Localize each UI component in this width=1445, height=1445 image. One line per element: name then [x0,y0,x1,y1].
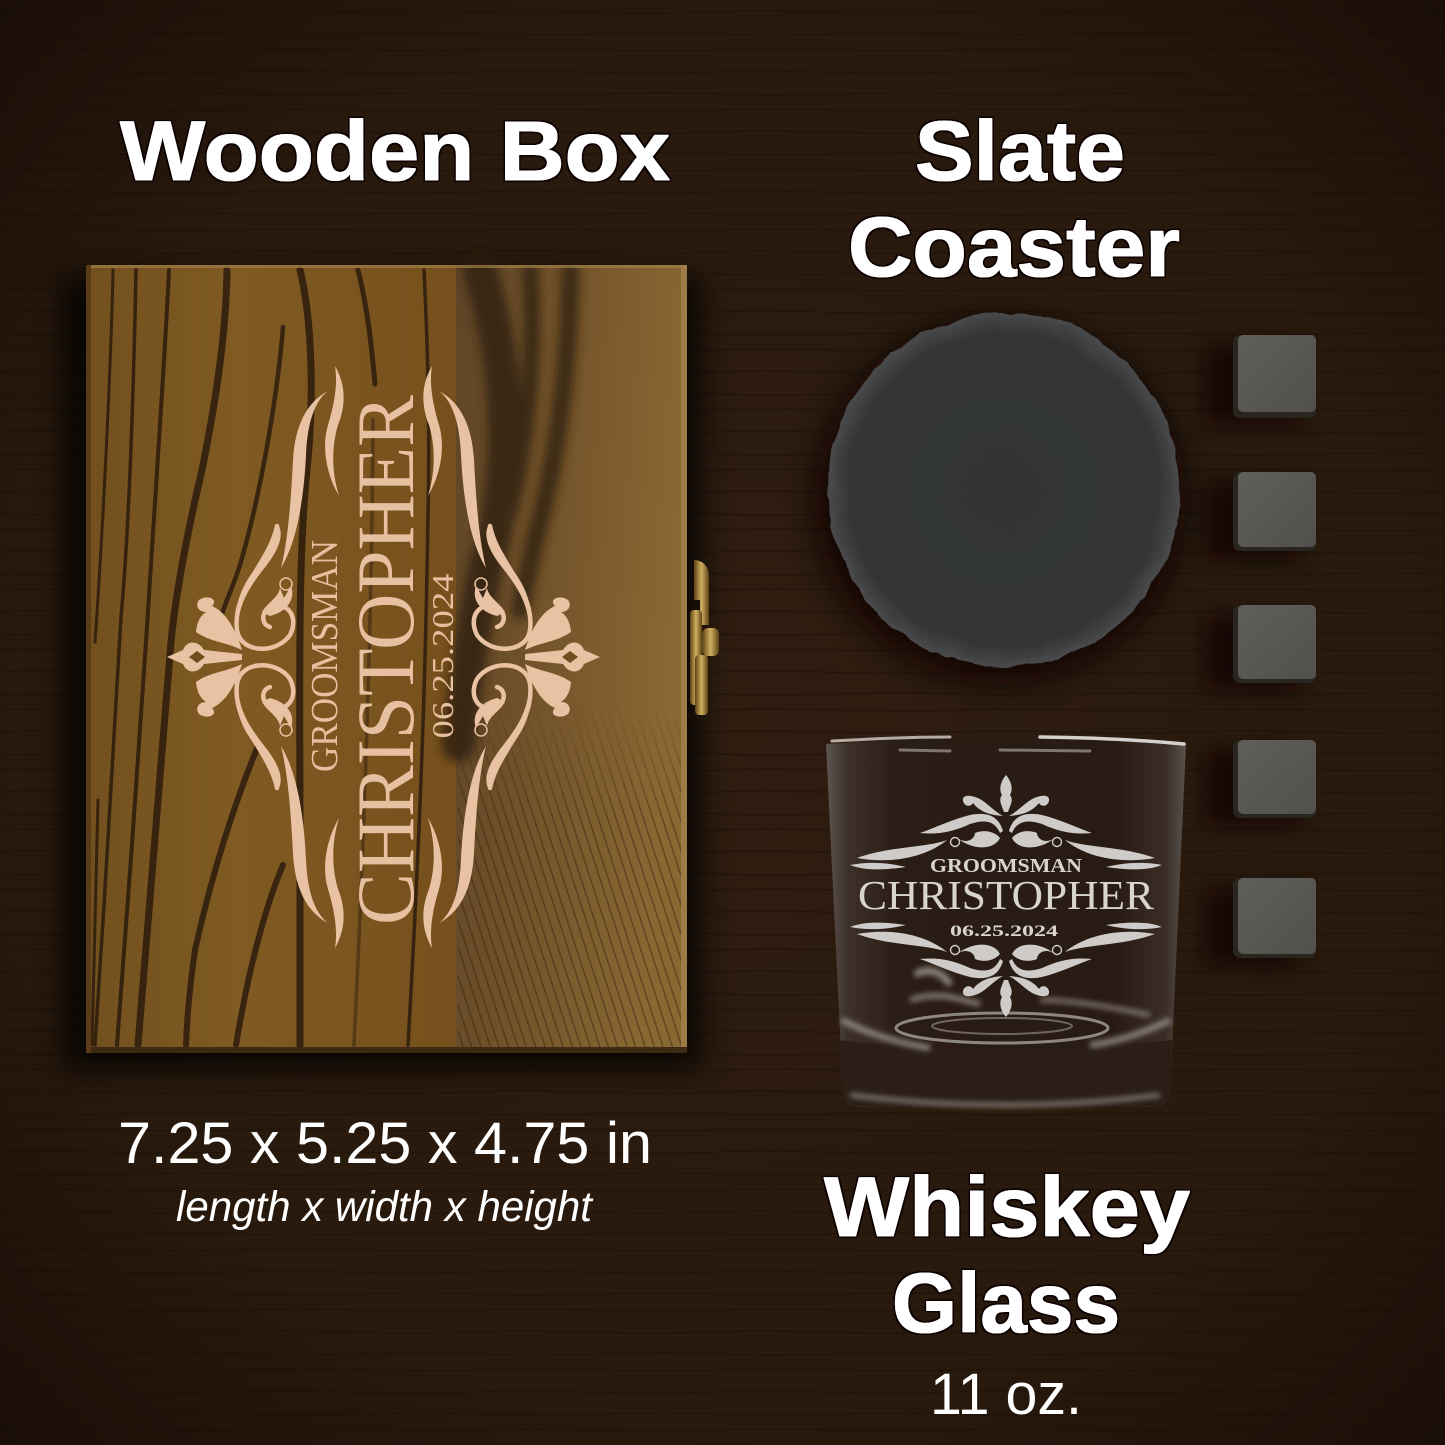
heading: Slate Coaster: Slate [915,104,1125,198]
glass engraved text: GROOMSMAN [930,855,1083,877]
glass engraved text: 06.25.2024 [950,923,1058,940]
box lid left wood [86,265,458,1053]
stone 1 [1233,335,1316,418]
box edge [681,265,687,1053]
right wood hatching [458,700,684,1050]
heading: Whiskey Glass: Glass [892,1256,1120,1350]
engraved text, rotated [304,395,460,925]
size caption: length x width x height [176,1183,594,1231]
wooden box with engraving [62,265,719,1070]
glass capacity: 11 oz. [930,1362,1082,1427]
rim highlights [832,737,1184,751]
box shadow [62,275,702,1070]
engraved ornaments [167,366,600,948]
stone 2 [1233,472,1316,551]
glass base [838,971,1172,1106]
heading: Slate Coaster: Coaster [848,200,1180,294]
heading: Whiskey Glass: Whiskey [824,1160,1190,1254]
dimensions text [118,1111,652,1231]
stone 3 [1233,605,1316,683]
whiskey glass [826,737,1186,1107]
stone 5 [1233,878,1316,958]
heading: Whiskey Glass [824,1160,1190,1350]
right wood dark figure [458,270,570,745]
stone 4 [1233,740,1316,818]
glass ornaments [850,775,1162,1017]
brass clasp [690,560,719,715]
stone shadows [1205,345,1300,966]
box size: 7.25 x 5.25 x 4.75 in [118,1111,652,1176]
engraved text, rotated: 06.25.2024 [425,573,460,738]
engraved text, rotated: GROOMSMAN [304,540,346,772]
box lid right wood [456,265,687,1053]
whiskey stones [1205,335,1316,966]
engraved text, rotated: CHRISTOPHER [340,395,431,925]
wood grain left [92,270,429,1045]
slate coaster [814,313,1186,684]
glass engraved text [858,855,1155,940]
glass engraved text: CHRISTOPHER [858,872,1155,918]
heading: Wooden Box: Wooden Box [120,104,670,198]
heading: Slate Coaster [848,104,1180,294]
